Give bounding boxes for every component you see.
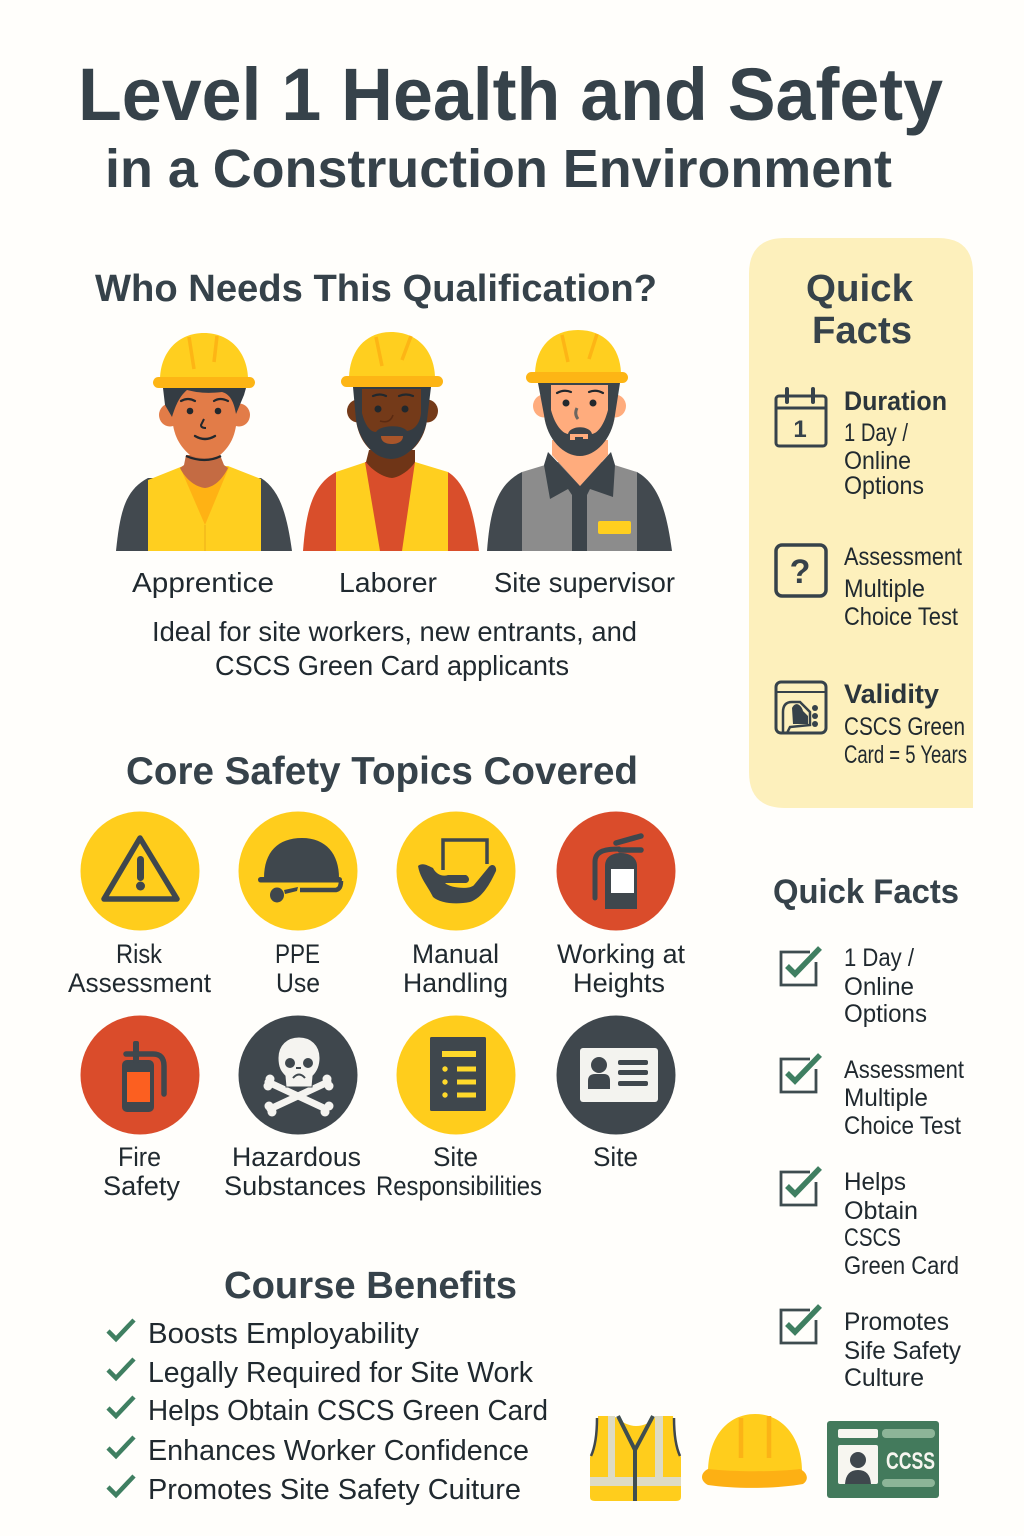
topic: site: Site xyxy=(593,1142,638,1172)
topic: risk assessment: Assessment xyxy=(68,968,211,998)
item: promotes: Sife Safety xyxy=(844,1337,961,1365)
worker labels: Site supervisor xyxy=(494,567,675,598)
card heading: Quick xyxy=(806,268,914,310)
topic: site responsibilities xyxy=(376,1016,542,1201)
item: helps obtain xyxy=(781,1168,959,1280)
icon: hard hat xyxy=(702,1414,807,1488)
item: helps obtain: Green Card xyxy=(844,1252,959,1280)
item: promotes xyxy=(781,1306,961,1392)
topic: site responsibilities: Responsibilities xyxy=(376,1171,542,1201)
icon: apprentice xyxy=(116,333,292,551)
topic: site responsibilities: Site xyxy=(433,1142,478,1172)
topic: manual handling: Manual xyxy=(412,939,499,969)
fact: duration: Options xyxy=(844,472,924,500)
panel: core topics grid xyxy=(68,812,685,1201)
topic: ppe use: PPE xyxy=(275,939,320,969)
fact: assessment: Assessment xyxy=(844,543,962,571)
icon: hi-vis vest xyxy=(590,1416,681,1501)
fact: validity: Card = 5 Years xyxy=(844,741,967,769)
fact: duration xyxy=(844,386,947,500)
item: helps obtain: Obtain xyxy=(844,1197,918,1225)
list: course benefits xyxy=(108,1318,548,1506)
item: promotes: Promotes xyxy=(844,1308,949,1336)
fact: duration: Online xyxy=(844,447,911,475)
topic: risk assessment xyxy=(68,812,211,998)
worker labels: Apprentice xyxy=(132,567,274,598)
icon: calendar xyxy=(776,389,826,446)
icon: site supervisor xyxy=(487,330,672,551)
topic: risk assessment: Risk xyxy=(116,939,162,969)
topic: ppe use: Use xyxy=(276,968,320,998)
panel: quick facts card xyxy=(749,238,973,808)
topic: working at heights: Working at xyxy=(557,939,685,969)
topic: hazardous substances: Substances xyxy=(224,1171,366,1201)
title: in a Construction Environment xyxy=(105,139,892,199)
topic: fire safety xyxy=(80,1016,200,1201)
icon: id card xyxy=(776,682,826,733)
item: one day: Online xyxy=(844,973,914,1001)
fact: assessment xyxy=(844,543,962,631)
list: course benefits: Legally Required for Site Work xyxy=(148,1357,533,1389)
icon: laborer xyxy=(303,332,479,551)
fact: assessment: Choice Test xyxy=(844,603,958,631)
topic: hazardous substances: Hazardous xyxy=(232,1142,361,1172)
heading: course benefits: Course Benefits xyxy=(224,1265,517,1307)
item: assessment: Multiple xyxy=(844,1084,928,1112)
fact: validity xyxy=(844,679,967,769)
heading: core safety topics: Core Safety Topics Covered xyxy=(126,750,638,793)
list: course benefits: Helps Obtain CSCS Green Card xyxy=(148,1395,548,1427)
item: helps obtain: CSCS xyxy=(844,1224,901,1252)
icon: calendar: 1 xyxy=(793,416,807,443)
text block: ideal for xyxy=(152,616,637,681)
panel: workers xyxy=(116,330,672,551)
title: Level 1 Health and Safety xyxy=(78,53,943,136)
item: promotes: Culture xyxy=(844,1364,924,1392)
text block: ideal for: Ideal for site workers, new entrants, and xyxy=(152,616,637,647)
item: one day xyxy=(781,944,927,1028)
fact: duration: Duration xyxy=(844,386,947,416)
worker labels xyxy=(132,567,675,598)
heading: quick facts checklist: Quick Facts xyxy=(773,873,959,911)
topic: fire safety: Safety xyxy=(103,1171,181,1201)
topic: manual handling xyxy=(396,812,516,998)
card heading xyxy=(806,268,914,352)
icon: question box xyxy=(776,545,826,596)
icon: cscs card: CCSS xyxy=(886,1448,935,1475)
panel: quick facts checklist xyxy=(781,944,964,1392)
heading: who needs this qualification: Who Needs This Qualification? xyxy=(95,268,657,310)
list: course benefits: Enhances Worker Confidence xyxy=(148,1435,529,1467)
topic: hazardous substances xyxy=(224,1016,366,1201)
topic: working at heights: Heights xyxy=(573,968,665,998)
list: course benefits: Boosts Employability xyxy=(148,1318,419,1350)
item: assessment xyxy=(781,1055,964,1140)
item: assessment: Assessment xyxy=(844,1056,964,1084)
topic: site xyxy=(556,1016,676,1172)
title xyxy=(78,53,943,199)
text block: ideal for: CSCS Green Card applicants xyxy=(215,650,569,681)
icon: question box: ? xyxy=(790,553,810,591)
topic: ppe use xyxy=(238,812,358,998)
fact: duration: 1 Day / xyxy=(844,419,908,447)
list: course benefits: Promotes Site Safety Cuiture xyxy=(148,1474,521,1506)
item: helps obtain: Helps xyxy=(844,1168,906,1196)
card heading: Facts xyxy=(812,310,912,352)
topic: working at heights xyxy=(556,812,685,998)
fact: validity: Validity xyxy=(844,679,939,709)
item: one day: 1 Day / xyxy=(844,944,914,972)
topic: manual handling: Handling xyxy=(403,968,508,998)
item: assessment: Choice Test xyxy=(844,1112,961,1140)
item: one day: Options xyxy=(844,1000,927,1028)
icon: cscs card xyxy=(827,1421,939,1498)
worker labels: Laborer xyxy=(339,567,437,598)
fact: assessment: Multiple xyxy=(844,575,925,603)
fact: validity: CSCS Green xyxy=(844,713,965,741)
topic: fire safety: Fire xyxy=(118,1142,161,1172)
